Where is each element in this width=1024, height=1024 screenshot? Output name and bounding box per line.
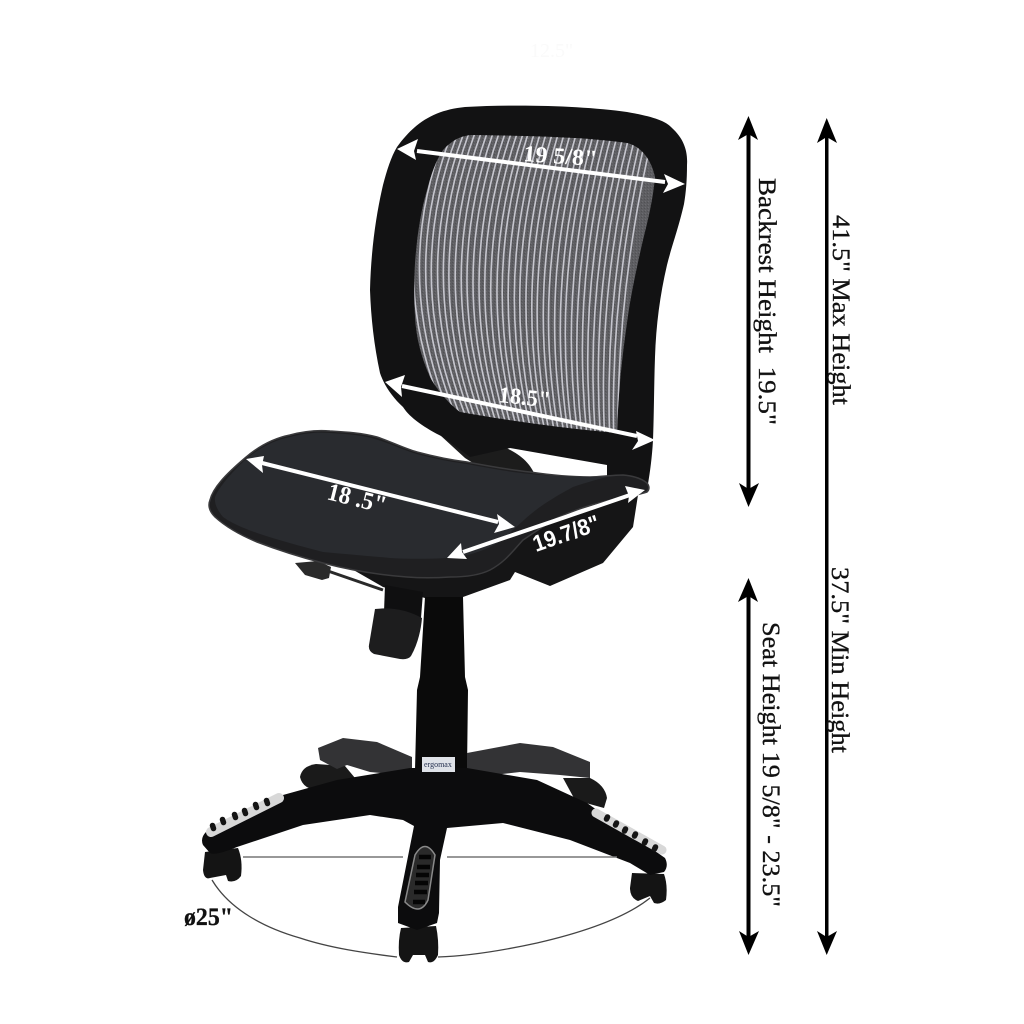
dimension arrow: seat width (447, 486, 645, 559)
brand sticker: ergomax (424, 760, 452, 769)
dimension arrow: backrest top width (397, 139, 685, 193)
five-star base (202, 768, 667, 930)
rear left caster (300, 764, 355, 790)
label: min height: 37.5" Min Height (826, 567, 853, 753)
dimension arrow: seat depth (246, 456, 515, 533)
arrow: seat height (738, 578, 759, 955)
front left caster (203, 848, 242, 881)
seat mesh surface (215, 433, 607, 559)
rear right caster (563, 778, 607, 808)
label: backrest top width: 19 5/8" (523, 141, 598, 171)
gas cylinder column (415, 597, 468, 770)
label: max height: 41.5" Max Height (827, 215, 854, 405)
arrow: backrest height (738, 116, 759, 507)
label: base diameter: ø25" (184, 904, 233, 931)
left arm grip (211, 798, 279, 832)
front right caster (630, 873, 667, 904)
label: seat depth: 18 .5" (325, 479, 389, 519)
base diameter ellipse (212, 857, 650, 957)
right arm grip (596, 813, 662, 850)
label: seat width: 19.7/8" (529, 510, 603, 557)
arrow: overall height (817, 118, 837, 955)
height adjustment knob (369, 585, 423, 659)
under-seat mechanism (350, 495, 638, 598)
rear left base arm (318, 738, 412, 776)
faint top label: 12.5" (530, 40, 573, 62)
dimension arrow: backrest bottom width (385, 375, 655, 450)
front arm grip (405, 846, 435, 909)
backrest frame (370, 106, 687, 484)
backrest support bracket (440, 435, 536, 480)
brand sticker (422, 757, 455, 772)
label: backrest height: Backrest Height 19.5" (753, 178, 780, 425)
chair (202, 106, 687, 962)
front caster (399, 926, 438, 962)
backrest mesh panel (414, 135, 655, 432)
tilt lever (295, 561, 383, 590)
seat rim (209, 431, 649, 578)
label: seat height: Seat Height 19 5/8" - 23.5" (757, 622, 784, 907)
rear right base arm (467, 743, 590, 778)
label: backrest bottom width: 18.5" (497, 382, 552, 412)
